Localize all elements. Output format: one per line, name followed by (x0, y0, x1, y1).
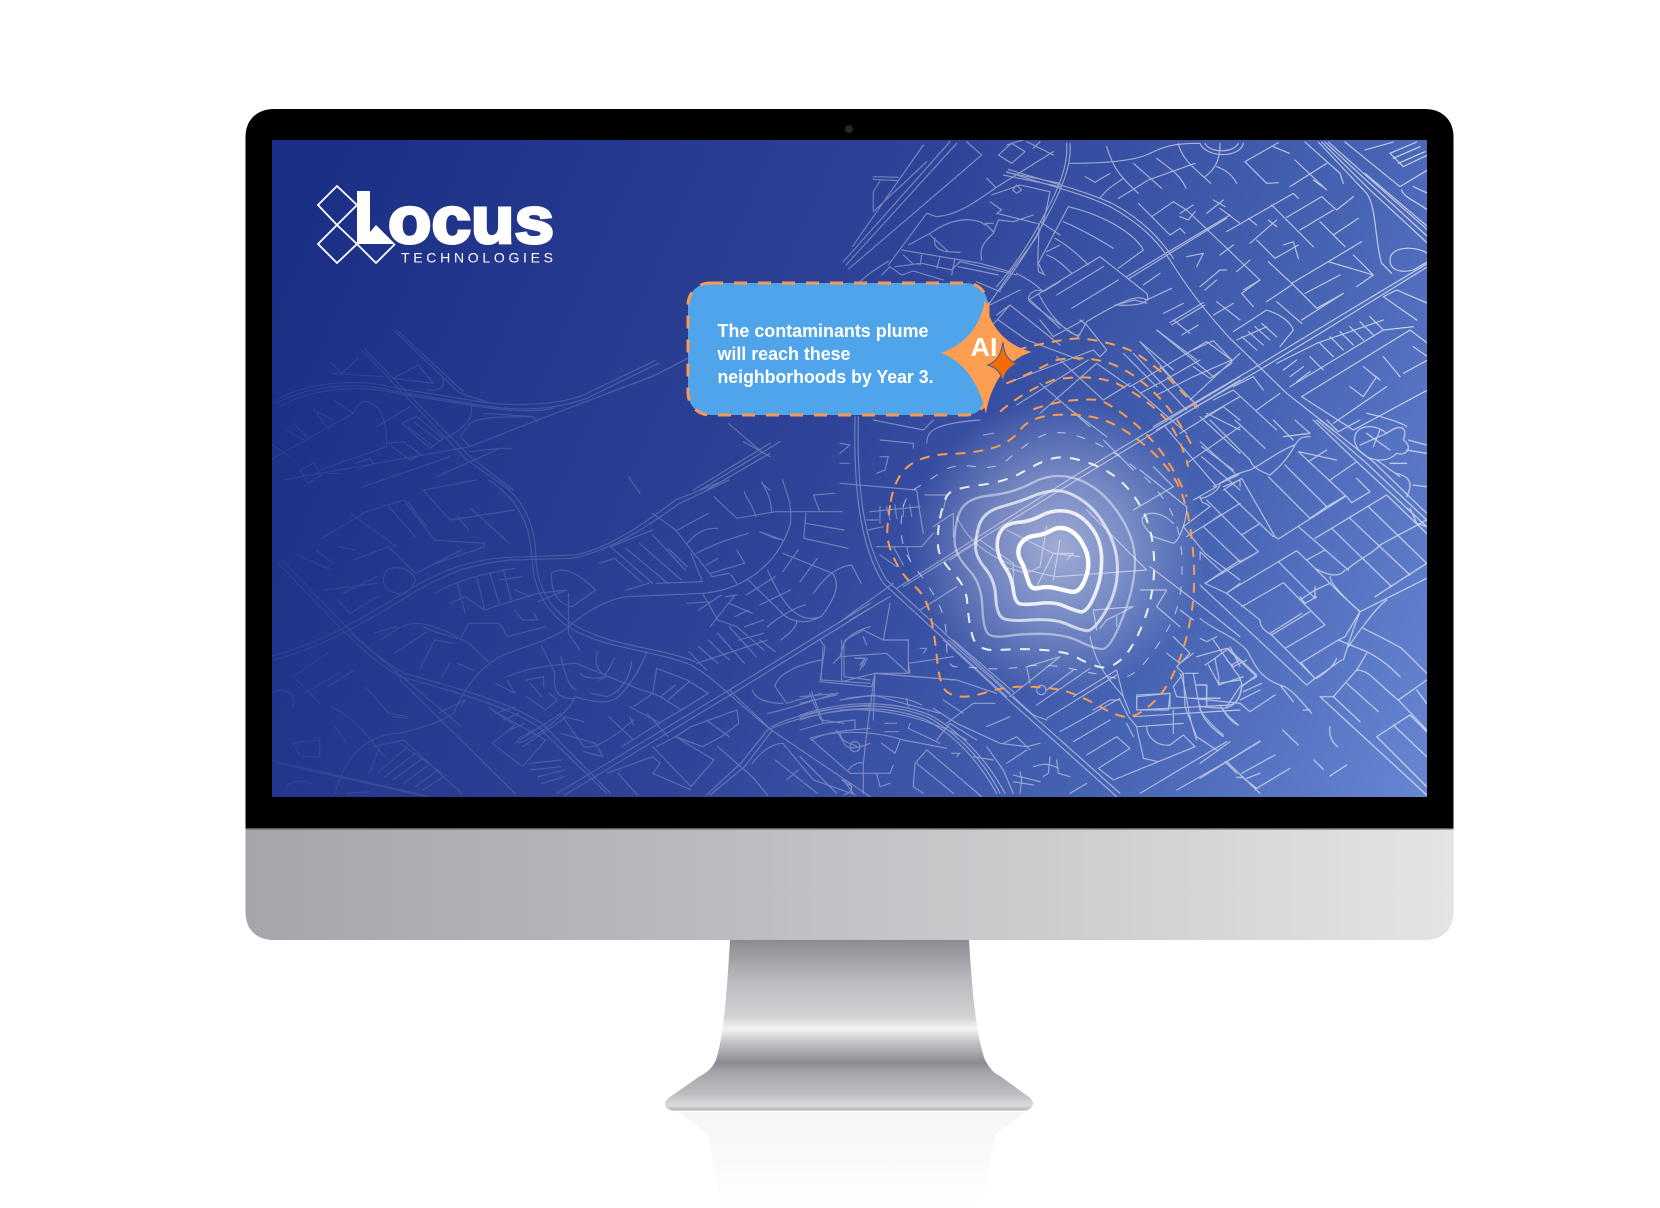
solid contour 2 (997, 511, 1102, 612)
callout text (717, 320, 934, 387)
monitor reflection (678, 1112, 1026, 1208)
logo wordmark: ocus (388, 183, 554, 257)
bold white dashed contour (938, 457, 1154, 667)
street map (270, 128, 1430, 797)
monitor stand (665, 940, 1033, 1110)
solid contour 4 (955, 476, 1135, 649)
orange forecast contours (887, 338, 1197, 717)
webcam (845, 125, 853, 133)
callout text: neighborhoods by Year 3. (718, 366, 934, 387)
logo tagline: TECHNOLOGIES (401, 250, 553, 266)
monitor bezel (246, 109, 1454, 829)
logo L (357, 191, 395, 244)
callout (688, 283, 1032, 415)
thin white dashed contour (901, 433, 1182, 678)
solid contour 3 (976, 491, 1117, 631)
infographic: monitor mockup (246, 109, 1454, 1122)
logo diamonds (318, 186, 395, 263)
screen panel (270, 128, 1430, 797)
logo: Locus Technologies (318, 183, 554, 266)
monitor chin (246, 829, 1454, 940)
icon: AI sparkle: AI (970, 332, 998, 362)
icon: AI sparkle (941, 298, 1032, 414)
callout box (688, 283, 988, 415)
plume glow (919, 409, 1194, 684)
callout text: will reach these (717, 343, 850, 364)
core contour (1018, 528, 1088, 592)
contaminant plume contours (887, 338, 1197, 717)
callout text: The contaminants plume (718, 320, 928, 341)
